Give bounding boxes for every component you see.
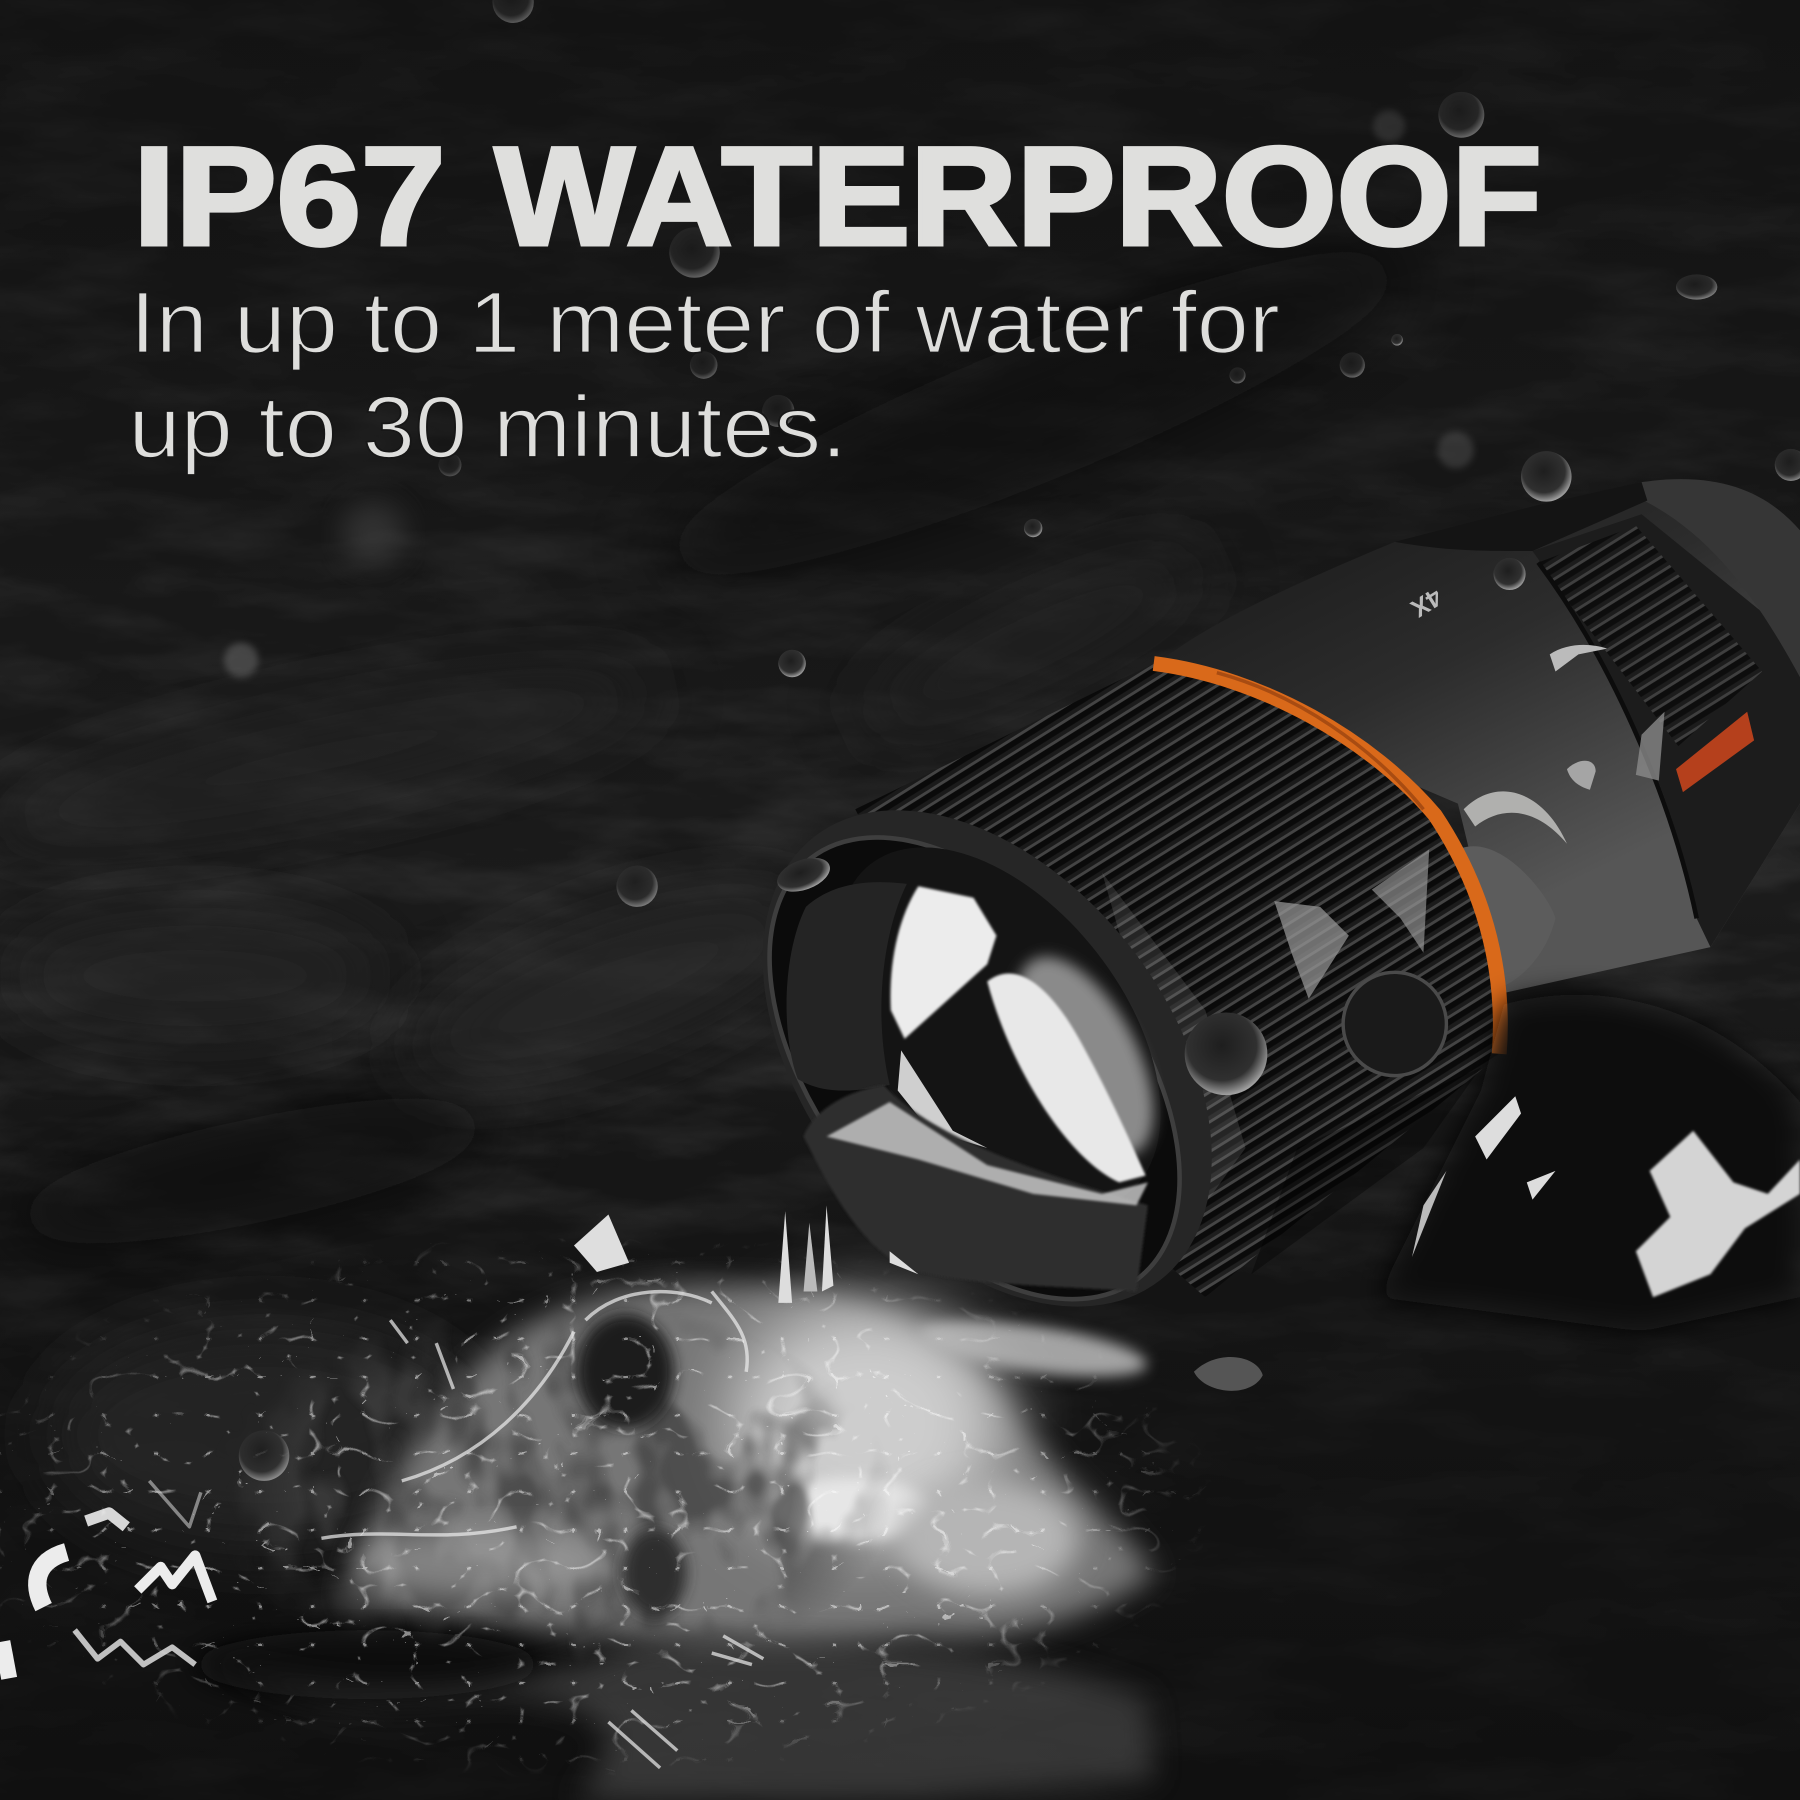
title: IP67 — [133, 118, 445, 275]
reflector barrel — [787, 882, 907, 1091]
orange ring — [1154, 664, 1500, 1054]
water over the lens — [574, 1085, 1263, 1391]
left sparkle splash — [2, 1481, 212, 1678]
flashlight tail and body — [1148, 479, 1800, 993]
subtitle: up to 30 minutes. — [129, 379, 847, 476]
foam highlight streaks — [321, 1291, 763, 1768]
product markings: 4X — [1406, 582, 1447, 622]
flashlight ribbed head — [855, 664, 1500, 1297]
water foam in foreground — [0, 1228, 1217, 1800]
subtitle — [129, 274, 1280, 476]
water droplets — [224, 0, 1800, 1481]
flashlight bezel — [671, 725, 1303, 1392]
background: dark water — [0, 16, 1800, 1402]
right water splash — [1378, 995, 1800, 1332]
title: WATERPROOF — [495, 118, 1542, 275]
subtitle: In up to 1 meter of water for — [130, 274, 1280, 371]
lens — [773, 788, 1225, 1270]
lens reflections — [890, 886, 1182, 1182]
head highlights — [1274, 901, 1349, 999]
